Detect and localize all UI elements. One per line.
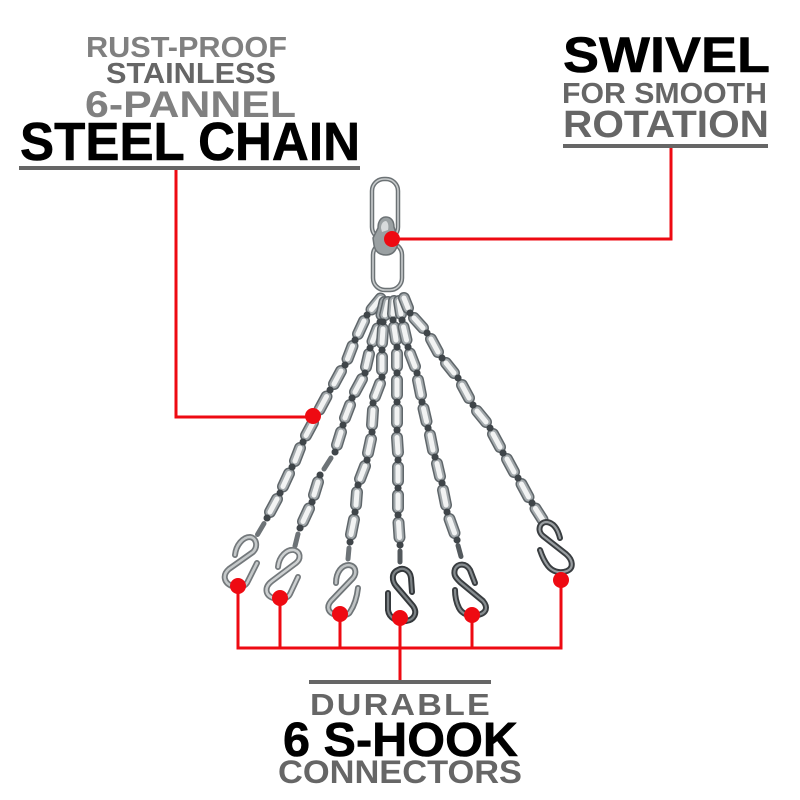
heading: s-hook connectors — [278, 680, 522, 790]
callout: swivel leader — [384, 148, 671, 247]
s-hook 4 — [388, 569, 415, 621]
s-hook 5 — [454, 565, 486, 616]
s-hook 2 — [266, 550, 300, 599]
heading: swivel: ROTATION — [563, 104, 769, 146]
chain strand 4 — [393, 301, 400, 562]
chain strand 2 — [295, 302, 384, 546]
chain strand 3 — [348, 302, 388, 559]
heading: s-hook connectors: CONNECTORS — [278, 754, 522, 790]
callout: s-hook leaders — [230, 572, 569, 682]
heading: swivel: SWIVEL — [563, 27, 770, 83]
heading: swivel — [562, 27, 770, 148]
s-hook 6 — [540, 522, 572, 572]
heading: swivel: FOR SMOOTH — [562, 78, 767, 110]
heading: steel chain: RUST-PROOF — [86, 32, 287, 64]
chain strand 5 — [399, 301, 461, 556]
s-hook 3 — [328, 565, 358, 616]
heading: steel chain: STAINLESS — [106, 58, 276, 90]
heading: steel chain — [19, 32, 360, 172]
heading: s-hook connectors: 6 S-HOOK — [283, 714, 518, 767]
swivel — [372, 179, 402, 290]
callout: steel chain leader — [176, 168, 321, 424]
heading: steel chain: STEEL CHAIN — [20, 112, 360, 172]
callout lines and markers — [176, 148, 671, 682]
chain strand 1 — [258, 298, 380, 534]
chain assembly — [225, 179, 572, 621]
chain strand 6 — [404, 298, 542, 520]
heading: s-hook connectors: DURABLE — [310, 687, 492, 722]
s-hook 1 — [225, 537, 257, 587]
heading: steel chain: 6-PANNEL — [85, 84, 296, 125]
